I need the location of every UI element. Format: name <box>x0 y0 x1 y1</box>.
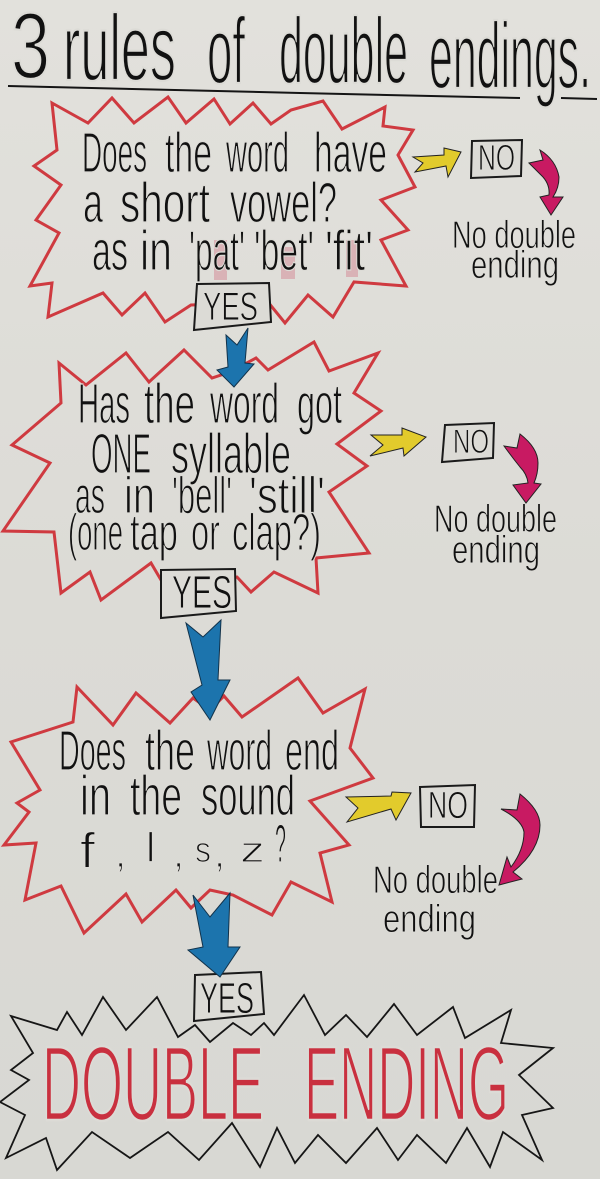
question text: one syllable: tap <box>130 504 178 562</box>
question text: one syllable: Has <box>78 372 130 436</box>
YES box 2: YES <box>172 566 232 618</box>
question text: one syllable: as <box>75 467 105 525</box>
question text: final sound: sound <box>201 764 295 828</box>
arrow: magenta curve 3 <box>499 794 540 885</box>
NO box 3: NO <box>428 785 468 827</box>
question text: one syllable <box>68 372 342 562</box>
result text: double ending: DOUBLE <box>42 1025 264 1143</box>
title <box>8 0 597 108</box>
question text: short vowel: have <box>314 121 387 185</box>
question text: final sound: word <box>206 719 272 783</box>
arrow: magenta down 2 <box>504 434 541 503</box>
panel: double ending burst <box>0 995 553 1170</box>
question text: one syllable: got <box>297 372 342 436</box>
question text: short vowel: short <box>120 171 210 235</box>
question text: final sound: z <box>240 829 265 870</box>
question text: short vowel: in <box>140 219 172 283</box>
YES box 3 <box>194 972 264 1023</box>
question text: final sound: the <box>145 719 195 783</box>
question text: short vowel: the <box>165 121 212 185</box>
text: no double ending 3: ending <box>383 898 476 941</box>
question text: one syllable: the <box>144 372 195 436</box>
title: double <box>279 0 408 103</box>
question text: final sound: end <box>285 719 339 783</box>
question text: final sound: , <box>115 832 126 876</box>
arrow: blue down 2 <box>186 620 230 720</box>
question text: final sound: , <box>214 832 225 876</box>
question text: final sound: s <box>195 829 211 870</box>
title: of <box>207 0 245 103</box>
question text: short vowel: 'bet' <box>254 219 314 283</box>
arrow: yellow no 1 <box>413 148 461 177</box>
question text: short vowel: a <box>83 171 103 235</box>
YES box 1: YES <box>203 285 258 329</box>
YES box 2 <box>161 566 236 618</box>
question text: one syllable: syllable <box>171 422 291 486</box>
NO box 2 <box>442 423 494 462</box>
question text: final sound: in <box>80 764 111 828</box>
question text: final sound: Does <box>59 719 126 783</box>
question text: one syllable: ONE <box>91 422 151 486</box>
question text: one syllable: clap?) <box>232 504 321 562</box>
question text: one syllable: in <box>124 467 155 525</box>
question text: one syllable: (one <box>68 504 123 562</box>
panel: rule 1 short vowel burst <box>30 97 415 323</box>
question text: one syllable: word <box>209 372 279 436</box>
question text: final sound <box>59 719 339 879</box>
arrow: yellow no 2 <box>370 428 426 456</box>
question text: short vowel <box>82 121 387 283</box>
NO box 2: NO <box>453 423 489 461</box>
question text: short vowel: vowel? <box>230 171 337 235</box>
question text: final sound: l <box>146 824 155 871</box>
question text: short vowel: Does <box>82 121 147 185</box>
question text: short vowel: as <box>92 219 128 283</box>
question text: short vowel: word <box>225 121 289 185</box>
question text: final sound: , <box>173 832 184 876</box>
vowel highlights <box>214 240 358 280</box>
question text: short vowel: 'fit' <box>325 219 373 283</box>
text: no double ending 1: ending <box>471 244 559 287</box>
question text: one syllable: 'bell' <box>172 467 232 525</box>
text: no double ending 2 <box>434 498 557 572</box>
NO box 1: NO <box>478 137 515 178</box>
arrow: yellow no 3 <box>346 792 411 822</box>
text: no double ending 3 <box>373 859 498 941</box>
question text: final sound: f <box>80 823 95 879</box>
arrow: magenta down 1 <box>529 150 563 215</box>
text: no double ending 2: ending <box>452 529 540 572</box>
panel: rule 3 final sound burst <box>4 678 373 933</box>
question text: final sound: the <box>130 764 182 828</box>
panel: rule 2 one syllable burst <box>3 342 381 600</box>
question text: final sound: ? <box>275 814 286 874</box>
arrow: blue down 1 <box>217 328 254 387</box>
YES box 3: YES <box>200 974 254 1023</box>
text: no double ending 3: No double <box>373 859 498 902</box>
text: no double ending 1 <box>452 214 576 287</box>
question text: one syllable: or <box>191 504 220 562</box>
question text: one syllable: 'still' <box>249 467 325 525</box>
arrow: blue down 3 <box>188 893 240 977</box>
question text: short vowel: 'pat' <box>189 219 245 283</box>
